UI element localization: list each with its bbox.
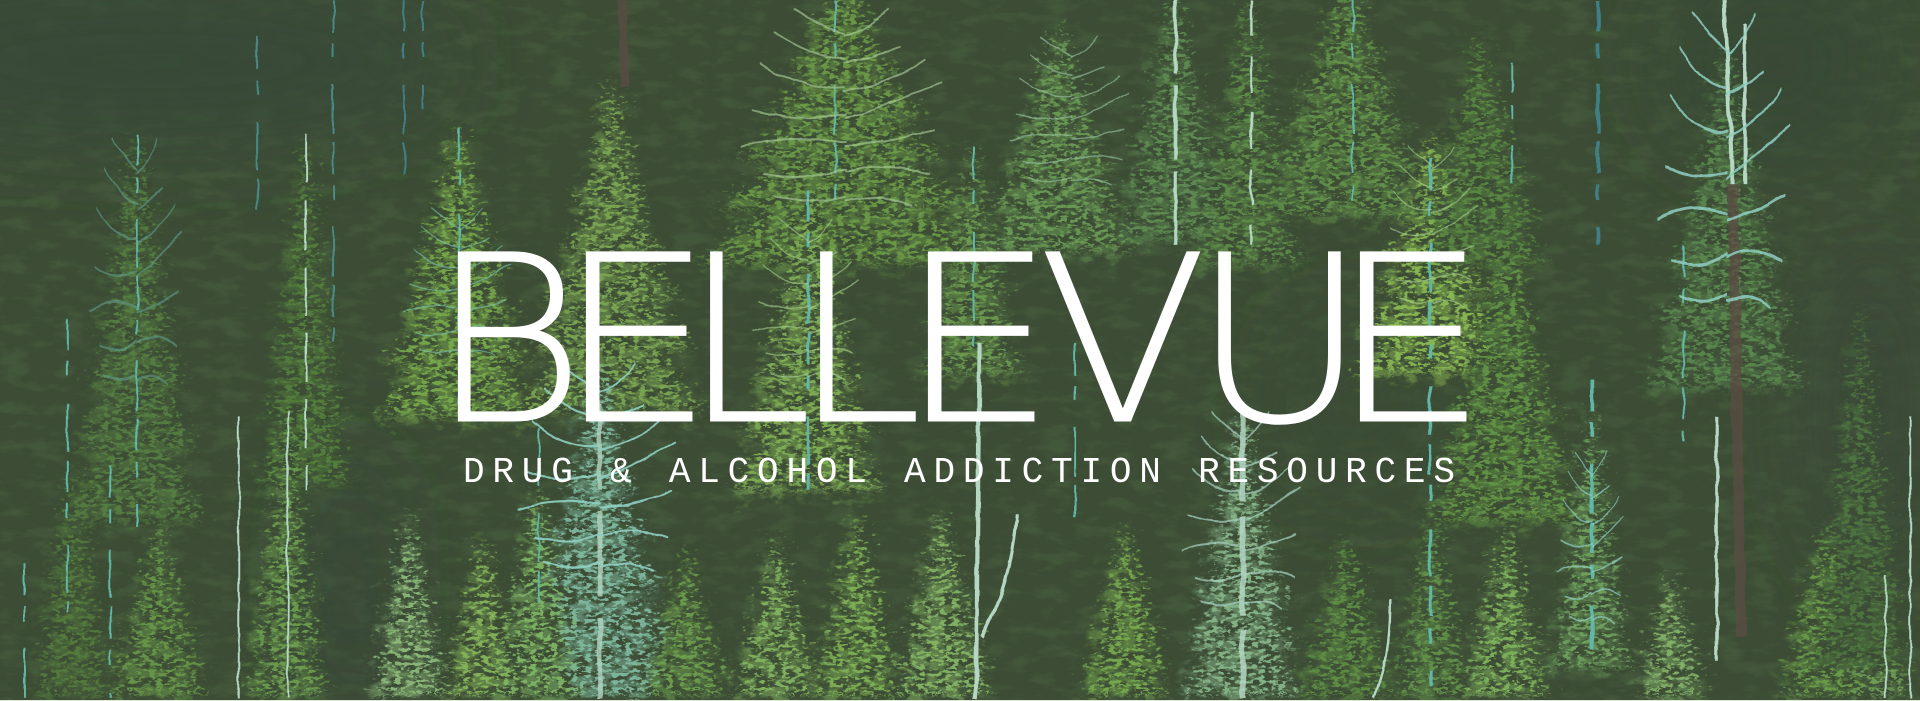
title: BELLEVUE <box>429 205 1488 476</box>
bottom edge line <box>0 700 1920 701</box>
title: BELLEVUE: E <box>898 206 1056 476</box>
title: BELLEVUE: V <box>1038 206 1208 476</box>
title: BELLEVUE: L <box>682 206 813 476</box>
title: BELLEVUE: E <box>556 206 714 476</box>
title: BELLEVUE: L <box>792 206 923 476</box>
subtitle: DRUG & ALCOHOL ADDICTION RESOURCES <box>463 452 1463 493</box>
title: BELLEVUE: B <box>429 205 585 476</box>
title: BELLEVUE: U <box>1192 205 1367 476</box>
title: BELLEVUE: E <box>1330 206 1488 476</box>
dark trunks <box>622 0 1741 637</box>
